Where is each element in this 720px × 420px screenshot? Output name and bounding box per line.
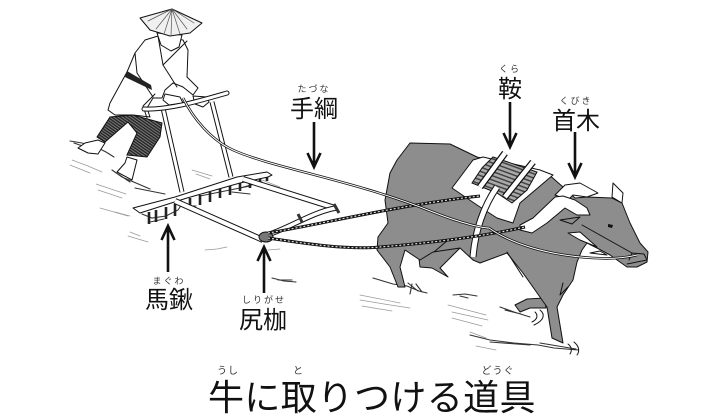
harrow: handle and posts (144, 93, 231, 192)
title with furigana: 牛に取りつける道具 (208, 377, 536, 418)
ox: saddle (472, 157, 537, 203)
ox: far legs (419, 248, 546, 312)
ox: eye and halter (608, 224, 613, 228)
label: 首木 (yoke) with arrow: くびき (559, 96, 593, 106)
label: 馬鍬 (harrow) with arrow (145, 226, 193, 314)
farmer: coat (108, 36, 198, 117)
title with furigana: うし (217, 365, 239, 377)
label: 鞍 (saddle) with arrow (498, 64, 522, 147)
farmer: face and hat (157, 33, 182, 51)
ox (377, 143, 648, 343)
title with furigana: どうぐ (482, 365, 514, 377)
label: 手綱 (reins) with arrow: たづな (297, 84, 331, 94)
label: 尻枷 (rear fitting) with arrow: 尻枷 (239, 307, 287, 334)
label: 鞍 (saddle) with arrow: くら (499, 64, 521, 74)
尻枷: shafts and rear bar (175, 179, 339, 242)
farmer: hands (163, 94, 209, 107)
label: 首木 (yoke) with arrow (552, 96, 600, 177)
馬鍬: harrow beam and teeth (133, 172, 272, 224)
ox: throat and muzzle (568, 232, 607, 255)
label: 尻枷 (rear fitting) with arrow (239, 247, 287, 334)
farmer: feet (78, 140, 137, 180)
label: 鞍 (saddle) with arrow: 鞍 (498, 76, 522, 103)
label: 馬鍬 (harrow) with arrow: まぐわ (152, 276, 186, 286)
paddy mud strokes (70, 141, 579, 355)
ox: muscle lines (434, 240, 568, 295)
label: 馬鍬 (harrow) with arrow: 馬鍬 (145, 287, 193, 314)
ox: body (377, 143, 648, 343)
label: 首木 (yoke) with arrow: 首木 (552, 108, 600, 135)
title with furigana: と (293, 365, 303, 377)
farmer (78, 9, 209, 180)
label: 尻枷 (rear fitting) with arrow: しりがせ (242, 294, 286, 305)
ox: breast strap (473, 187, 497, 257)
首木: yoke and horn (555, 183, 598, 200)
farmer: trousers (97, 115, 162, 157)
ox: ear (560, 217, 580, 224)
ox: saddle blanket (452, 157, 553, 223)
label: 手綱 (reins) with arrow: 手綱 (290, 96, 338, 123)
ropes and reins (183, 98, 637, 258)
label: 手綱 (reins) with arrow (290, 84, 338, 167)
